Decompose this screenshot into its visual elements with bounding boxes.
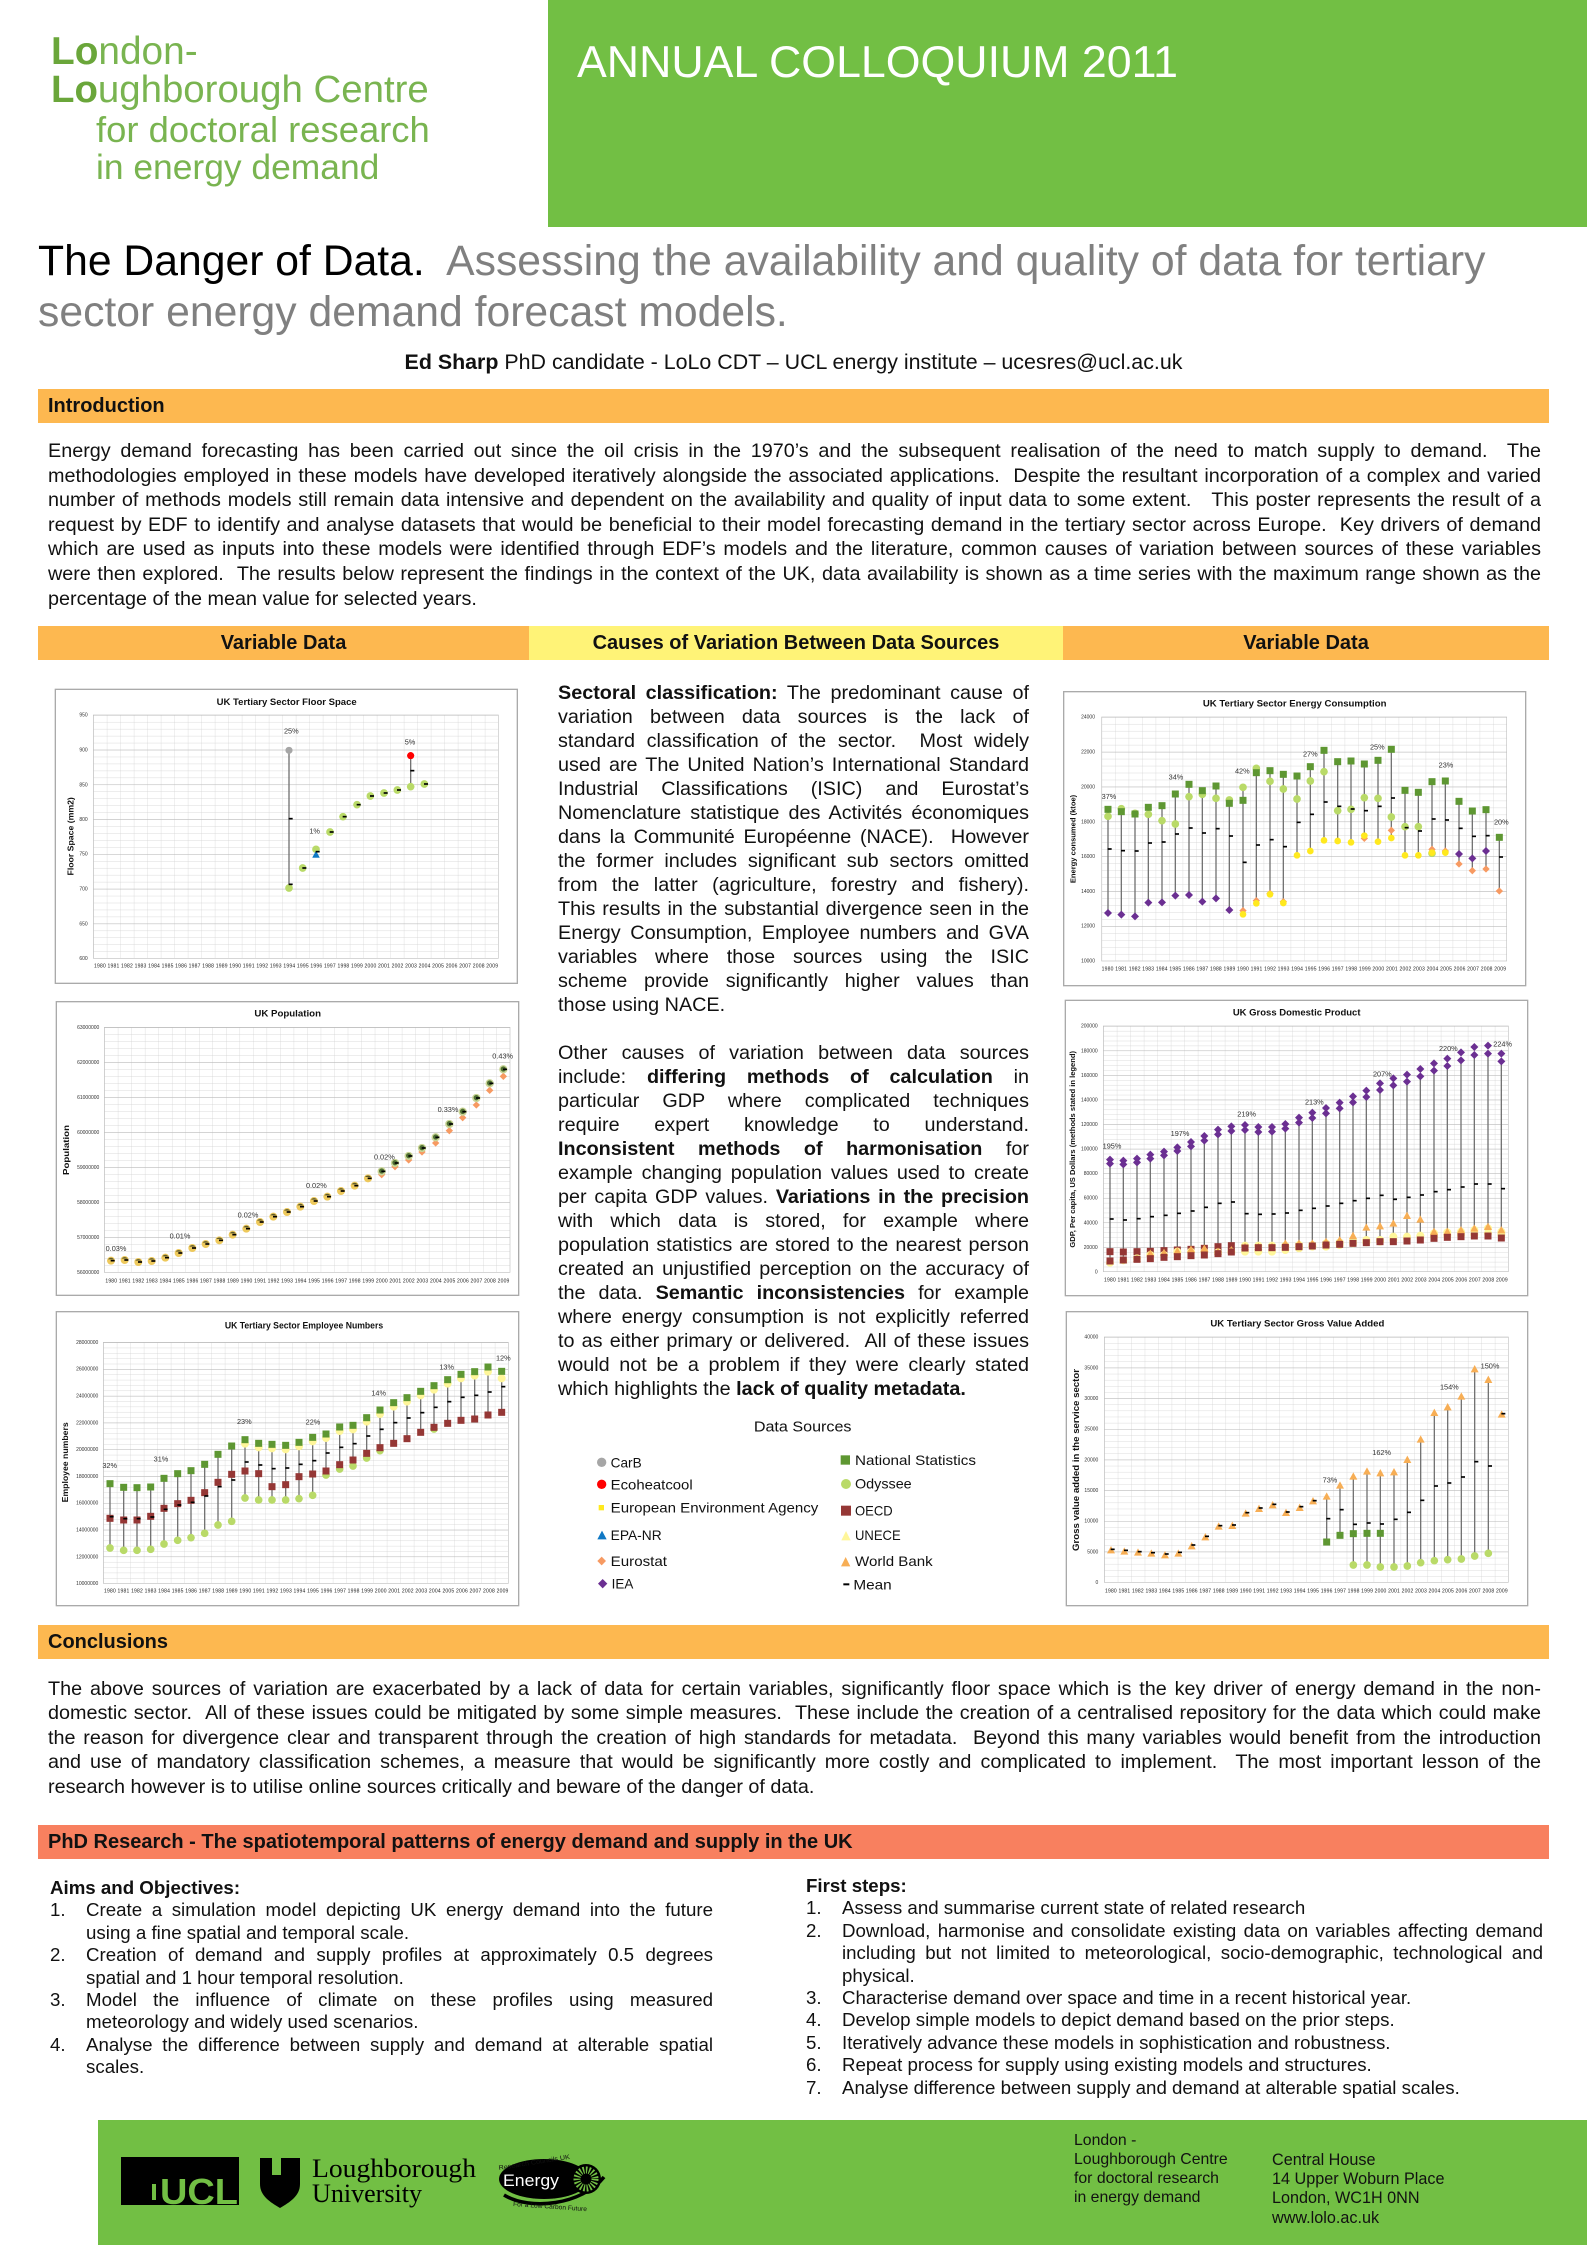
y axis labels: 180000 xyxy=(1081,1048,1098,1054)
legend column 1: Ecoheatcool xyxy=(611,1476,693,1492)
chart title: UK Tertiary Sector Energy Consumption xyxy=(1203,699,1386,709)
legend column 2: OECD xyxy=(855,1503,893,1519)
text: aims and objectives: spatial and 1 hour temporal resolution. xyxy=(86,1967,404,1988)
text: first steps: 4. xyxy=(806,2009,822,2030)
text: first steps: including but not limited to meteorological, socio-demographic, technological and xyxy=(842,1942,1543,1963)
text: causes of variation: would not be a problem if they were clearly stated xyxy=(558,1354,1029,1376)
logo: Energy: Research Councils UK xyxy=(498,2154,571,2172)
text: conclusions: the reason for divergence clear and transparent through the creation of high standards for metadata. Beyond this many variables would benefit from the introduction xyxy=(48,1727,1541,1749)
text: causes of variation: those using NACE. xyxy=(558,994,725,1016)
text: causes of variation: to as either primary or delivered. All of these issues xyxy=(558,1330,1029,1352)
x axis labels: 1980 1981 1982 1983 1984 1985 1986 1987 1988 1989 1990 1991 1992 1993 1994 1995 1996 1997 1998 1999 2000 2001 2002 2003 2004 2005 2006 2007 2008 2009 xyxy=(1104,1278,1508,1284)
text: first steps: Iteratively advance these models in sophistication and robustness. xyxy=(842,2032,1390,2053)
text: causes of variation: This results in the substantial divergence seen in the xyxy=(558,898,1029,920)
text: first steps: Characterise demand over space and time in a recent historical year. xyxy=(842,1987,1411,2008)
y axis labels: 61000000 xyxy=(77,1095,100,1101)
range labels: 34% xyxy=(1169,773,1184,782)
y axis labels xyxy=(1084,1335,1099,1586)
x axis labels: 1980 1981 1982 1983 1984 1985 1986 1987 1988 1989 1990 1991 1992 1993 1994 1995 1996 1997 1998 1999 2000 2001 2002 2003 2004 2005 2006 2007 2008 2009 xyxy=(105,1278,510,1284)
text: causes of variation: variation between data sources is the lack of xyxy=(558,706,1029,728)
footer text: address: Central House xyxy=(1272,2151,1375,2169)
text: aims and objectives: meteorology and widely used scenarios. xyxy=(86,2011,418,2032)
text: aims and objectives: scales. xyxy=(86,2056,144,2077)
chart title: UK Tertiary Sector Floor Space xyxy=(217,697,357,707)
y axis labels: 700 xyxy=(79,886,88,892)
text: causes of variation: from the latter (agriculture, forestry and fishery). xyxy=(558,874,1029,896)
range labels: 154% xyxy=(1440,1383,1459,1392)
text: introduction xyxy=(48,440,1541,610)
text: first steps: 1. xyxy=(806,1897,822,1918)
y axis labels: 57000000 xyxy=(77,1235,100,1241)
text: causes of variation: where energy consumption is not explicitly referred xyxy=(558,1306,1029,1328)
text: first steps: 5. xyxy=(806,2032,822,2053)
range labels: 5% xyxy=(405,738,416,747)
range labels: 150% xyxy=(1481,1362,1500,1371)
heading: Variable Data right xyxy=(1063,626,1549,660)
chart: UK Tertiary Sector Gross Value Added xyxy=(1066,1311,1528,1606)
x axis labels: 1980 1981 1982 1983 1984 1985 1986 1987 1988 1989 1990 1991 1992 1993 1994 1995 1996 1997 1998 1999 2000 2001 2002 2003 2004 2005 2006 2007 2008 2009 xyxy=(94,964,498,970)
range labels: 197% xyxy=(1171,1129,1190,1138)
data series xyxy=(111,1069,503,1262)
range labels: 25% xyxy=(284,726,299,735)
legend column 1 xyxy=(597,1454,818,1592)
legend column 2: Mean xyxy=(853,1576,892,1592)
footer text: address: 14 Upper Woburn Place xyxy=(1272,2170,1444,2188)
y axis labels: 25000 xyxy=(1084,1427,1099,1433)
y axis title: Gross value added in the service sector xyxy=(1071,1369,1081,1551)
range labels: 23% xyxy=(237,1417,252,1426)
logo: Loughborough University xyxy=(260,2156,476,2208)
range labels: 0.33% xyxy=(438,1105,459,1114)
poster title: sector energy demand forecast models. xyxy=(38,288,788,336)
legend column 1: CarB xyxy=(611,1454,642,1470)
logo: Energy xyxy=(498,2154,606,2213)
y axis labels: 14000 xyxy=(1081,889,1095,895)
text: aims and objectives: Creation of demand and supply profiles at approximately 0.5 degrees xyxy=(86,1944,713,1965)
x axis labels: 1980 1981 1982 1983 1984 1985 1986 1987 1988 1989 1990 1991 1992 1993 1994 1995 1996 1997 1998 1999 2000 2001 2002 2003 2004 2005 2006 2007 2008 2009 xyxy=(1102,967,1506,973)
y axis labels: 20000000 xyxy=(76,1447,99,1453)
logo: Loughborough University: University xyxy=(312,2179,422,2208)
y axis labels xyxy=(77,1025,100,1276)
text: aims and objectives: 2. xyxy=(50,1944,66,1965)
text: conclusions: domestic sector. All of these issues could be mitigated by some simple measures. These include the creation of a centralised repository for the data which could make xyxy=(48,1702,1541,1724)
footer text: centre name: in energy demand xyxy=(1074,2189,1200,2206)
text: first steps: First steps: xyxy=(806,1875,907,1896)
text: conclusions xyxy=(48,1678,1541,1798)
y axis labels: 62000000 xyxy=(77,1060,100,1066)
chart title: UK Tertiary Sector Gross Value Added xyxy=(1210,1319,1384,1329)
range labels: 31% xyxy=(154,1455,169,1464)
y axis labels: 30000 xyxy=(1084,1396,1099,1402)
x axis labels: 1980 1981 1982 1983 1984 1985 1986 1987 1988 1989 1990 1991 1992 1993 1994 1995 1996 1997 1998 1999 2000 2001 2002 2003 2004 2005 2006 2007 2008 2009 xyxy=(104,1589,509,1595)
y axis labels: 20000 xyxy=(1084,1245,1098,1251)
y axis title: Floor Space (mm2) xyxy=(66,797,76,875)
poster title: The Danger of Data. Assessing the availability and quality of data for tertiary xyxy=(38,237,1485,285)
heading: Conclusions xyxy=(38,1625,1549,1659)
heading: Introduction xyxy=(38,389,1549,423)
range labels xyxy=(106,1052,514,1253)
text: first steps: Assess and summarise current state of related research xyxy=(842,1897,1305,1918)
chart: UK Tertiary Sector Energy Consumption xyxy=(1063,691,1526,986)
text: causes of variation: with which data is stored, for example where xyxy=(558,1210,1029,1232)
y axis labels: 14000000 xyxy=(76,1527,99,1533)
range labels: 0.02% xyxy=(238,1210,259,1219)
legend column 2: World Bank xyxy=(855,1553,934,1569)
y axis labels: 20000 xyxy=(1084,1457,1099,1463)
text: causes of variation: the data. Semantic inconsistencies for example xyxy=(558,1282,1029,1304)
y axis labels: 16000000 xyxy=(76,1501,99,1507)
chart: UK Population xyxy=(56,1001,520,1296)
y axis labels: 10000 xyxy=(1081,959,1095,965)
text: first steps: 3. xyxy=(806,1987,822,2008)
y axis labels: 22000 xyxy=(1081,750,1095,756)
range labels: 25% xyxy=(1370,743,1385,752)
heading: Causes of Variation xyxy=(529,626,1063,660)
text: causes of variation: per capita GDP values. Variations in the precision xyxy=(558,1186,1029,1208)
y axis labels: 850 xyxy=(79,782,88,788)
logo: London-Loughborough Centre: London- xyxy=(51,30,198,73)
y axis labels: 16000 xyxy=(1081,854,1095,860)
range labels: 32% xyxy=(102,1461,117,1470)
text: first steps: 2. xyxy=(806,1920,822,1941)
text: causes of variation: Sectoral classification: The predominant cause of xyxy=(558,682,1029,704)
text: conclusions: research however is to utilise online sources critically and beware of the danger of data. xyxy=(48,1776,814,1798)
range labels: 1% xyxy=(309,826,320,835)
heading: Variable Data right: Variable Data xyxy=(1243,632,1369,654)
range labels: 220% xyxy=(1439,1044,1458,1053)
range labels: 219% xyxy=(1237,1110,1257,1119)
y axis labels: 20000 xyxy=(1081,784,1095,790)
heading: Introduction: Introduction xyxy=(48,395,165,417)
range labels: 224% xyxy=(1493,1039,1513,1048)
y axis labels xyxy=(76,1340,99,1587)
y axis labels: 120000 xyxy=(1081,1122,1098,1128)
text: causes of variation: scheme provide significantly higher values than xyxy=(558,970,1029,992)
chart: UK Gross Domestic Product xyxy=(1064,1000,1528,1296)
y axis labels: 60000000 xyxy=(77,1130,100,1136)
footer text: address: London, WC1H 0NN xyxy=(1272,2189,1420,2207)
y axis labels: 5000 xyxy=(1087,1549,1099,1555)
text: causes of variation: variables where those sources using the ISIC xyxy=(558,946,1029,968)
range labels: 0.43% xyxy=(492,1052,514,1061)
footer text: centre name: Loughborough Centre xyxy=(1074,2151,1228,2168)
y axis labels: 40000 xyxy=(1084,1220,1098,1226)
logo: London-Loughborough Centre: for doctoral research xyxy=(96,109,430,150)
text: aims and objectives: Analyse the difference between supply and demand at alterable spatial xyxy=(86,2034,713,2055)
text: aims and objectives: Aims and Objectives: xyxy=(50,1877,240,1898)
text: aims and objectives: 4. xyxy=(50,2034,66,2055)
range labels: 14% xyxy=(371,1388,386,1397)
heading: Variable Data left xyxy=(38,626,529,660)
chart title: UK Tertiary Sector Employee Numbers xyxy=(225,1321,383,1331)
legend column 2 xyxy=(841,1452,976,1592)
y axis labels: 28000000 xyxy=(76,1340,99,1346)
legend column 2: National Statistics xyxy=(855,1452,976,1468)
banner title: ANNUAL COLLOQUIUM 2011 xyxy=(577,38,1178,87)
logo: Energy: Energy xyxy=(503,2171,560,2190)
text: causes of variation: include: differing methods of calculation in xyxy=(558,1066,1029,1088)
text: introduction: which are used as inputs into these models were identified through EDF’s models and the literature, common causes of variation between sources of these variables xyxy=(48,538,1541,560)
y axis labels xyxy=(79,713,88,962)
header banner xyxy=(548,0,1587,227)
text: first steps xyxy=(806,1875,1543,2098)
y axis labels: 950 xyxy=(79,713,88,719)
chart title: UK Gross Domestic Product xyxy=(1233,1008,1360,1018)
y axis labels: 59000000 xyxy=(77,1165,100,1171)
data series xyxy=(289,750,424,888)
y axis labels: 12000000 xyxy=(76,1554,99,1560)
logo: London-Loughborough Centre: in energy demand xyxy=(96,147,379,187)
range labels: 0.01% xyxy=(170,1231,191,1240)
y axis title: Population xyxy=(61,1125,71,1175)
heading: PhD Research: PhD Research - The spatiotemporal patterns of energy demand and supply in the UK xyxy=(48,1831,853,1853)
text: first steps: Repeat process for supply using existing models and structures. xyxy=(842,2054,1372,2075)
text: causes of variation: population statistics are stored to the nearest person xyxy=(558,1234,1029,1256)
range labels: 37% xyxy=(1102,792,1117,801)
range labels: 195% xyxy=(1103,1142,1122,1151)
range labels xyxy=(102,1354,511,1470)
text: conclusions: The above sources of variation are exacerbated by a lack of data for certain variables, significantly floor space which is the key driver of energy demand in the non- xyxy=(48,1678,1541,1700)
y axis labels: 56000000 xyxy=(77,1270,100,1276)
range labels: 0.02% xyxy=(374,1153,395,1162)
y axis labels: 24000000 xyxy=(76,1394,99,1400)
range labels: 207% xyxy=(1373,1069,1392,1078)
range labels xyxy=(1323,1362,1500,1485)
y axis labels: 0 xyxy=(1095,1269,1098,1275)
y axis title: Energy consumed (ktoe) xyxy=(1069,794,1078,883)
text: first steps: Analyse difference between supply and demand at alterable spatial scales. xyxy=(842,2077,1460,2098)
text: causes of variation: Nomenclature statistique des Activités économiques xyxy=(558,802,1029,824)
range labels: 12% xyxy=(496,1354,511,1363)
text: causes of variation: the former includes significant sub sectors omitted xyxy=(558,850,1029,872)
text: causes of variation: dans la Communité Européenne (NACE). However xyxy=(558,826,1029,848)
y axis labels: 0 xyxy=(1096,1580,1099,1586)
legend column 2: UNECE xyxy=(855,1527,901,1543)
range labels: 0.03% xyxy=(106,1244,127,1253)
y axis labels: 15000 xyxy=(1084,1488,1099,1494)
y axis labels: 24000 xyxy=(1081,715,1095,721)
text: aims and objectives: Model the influence of climate on these profiles using measured xyxy=(86,1989,713,2010)
data series xyxy=(1110,1046,1501,1263)
x axis labels: 1980 1981 1982 1983 1984 1985 1986 1987 1988 1989 1990 1991 1992 1993 1994 1995 1996 1997 1998 1999 2000 2001 2002 2003 2004 2005 2006 2007 2008 2009 xyxy=(1105,1588,1508,1594)
y axis title: Employee numbers xyxy=(60,1422,70,1502)
y axis labels: 80000 xyxy=(1084,1171,1098,1177)
y axis labels: 12000 xyxy=(1081,924,1095,930)
y axis labels: 40000 xyxy=(1084,1335,1099,1341)
range labels: 213% xyxy=(1305,1098,1324,1107)
legend: data sources xyxy=(597,1419,976,1592)
range labels: 0.02% xyxy=(306,1181,327,1190)
chart title: UK Population xyxy=(254,1009,321,1019)
chart: UK Tertiary Sector Employee Numbers xyxy=(56,1311,520,1606)
author line: Ed Sharp PhD candidate - LoLo CDT – UCL energy institute – ucesres@ucl.ac.uk xyxy=(405,350,1182,374)
y axis title: GDP, Per capita, US Dollars (methods stated in legend) xyxy=(1068,1050,1077,1248)
y axis labels: 160000 xyxy=(1081,1073,1098,1079)
y axis labels: 750 xyxy=(79,852,88,858)
legend column 1: IEA xyxy=(612,1576,634,1592)
chart: UK Tertiary Sector Floor Space xyxy=(54,688,518,984)
logo: London-Loughborough Centre xyxy=(51,30,430,187)
heading: Causes of Variation: Causes of Variation Between Data Sources xyxy=(593,632,999,654)
text: introduction: Energy demand forecasting has been carried out since the oil crisis in the 1970’s and the subsequent realisation of the need to match supply to demand. The xyxy=(48,440,1541,462)
range labels xyxy=(284,726,416,835)
range labels: 20% xyxy=(1494,818,1509,827)
data series xyxy=(1111,1369,1502,1567)
range labels: 13% xyxy=(439,1363,454,1372)
text: first steps: Download, harmonise and consolidate existing data on variables affecting demand xyxy=(842,1920,1543,1941)
y axis labels: 600 xyxy=(79,956,88,962)
footer band xyxy=(98,2120,1587,2245)
text: causes of variation: which highlights the lack of quality metadata. xyxy=(558,1378,966,1400)
text: introduction: methodologies employed in these models have developed iteratively alongside the associated applications. Despite the resultant incorporation of a complex and varied xyxy=(48,465,1541,487)
text: aims and objectives xyxy=(50,1877,713,2077)
legend column 2: Odyssee xyxy=(855,1475,912,1491)
text: causes of variation: used are The United Nation’s International Standard xyxy=(558,754,1029,776)
legend column 1: EPA-NR xyxy=(611,1527,662,1543)
text: causes of variation: require expert knowledge to understand. xyxy=(558,1114,1029,1136)
text: first steps: 7. xyxy=(806,2077,822,2098)
footer text: address: www.lolo.ac.uk xyxy=(1272,2209,1379,2227)
y axis labels: 26000000 xyxy=(76,1367,99,1373)
text: aims and objectives: Create a simulation model depicting UK energy demand into the future xyxy=(86,1899,713,1920)
legend title: Data Sources xyxy=(754,1419,852,1435)
y axis labels: 35000 xyxy=(1084,1365,1099,1371)
y axis labels: 100000 xyxy=(1081,1147,1098,1153)
heading: Variable Data left: Variable Data xyxy=(221,632,346,654)
footer text: centre name: for doctoral research xyxy=(1074,2170,1219,2187)
y axis labels: 800 xyxy=(79,817,88,823)
text: causes of variation: Industrial Classifications (ISIC) and Eurostat’s xyxy=(558,778,1029,800)
text: causes of variation: Other causes of variation between data sources xyxy=(558,1042,1029,1064)
heading: PhD Research xyxy=(38,1825,1549,1859)
text: causes of variation xyxy=(558,682,1030,1400)
y axis labels: 60000 xyxy=(1084,1196,1098,1202)
legend column 1: European Environment Agency xyxy=(611,1500,818,1516)
y axis labels: 18000000 xyxy=(76,1474,99,1480)
range labels xyxy=(1103,1039,1513,1151)
y axis labels: 10000000 xyxy=(76,1581,99,1587)
logo: UCL xyxy=(121,2157,239,2205)
text: introduction: were then explored. The results below represent the findings in the context of the UK, data availability is shown as a time series with the maximum range shown as the xyxy=(48,563,1541,585)
y axis labels: 58000000 xyxy=(77,1200,100,1206)
y axis labels: 18000 xyxy=(1081,819,1095,825)
heading: Conclusions: Conclusions xyxy=(48,1631,168,1653)
range labels: 27% xyxy=(1303,749,1318,758)
logo: London-Loughborough Centre: Loughborough Centre xyxy=(51,68,429,111)
y axis labels: 650 xyxy=(79,921,88,927)
y axis labels: 200000 xyxy=(1081,1024,1098,1030)
footer text: address xyxy=(1272,2151,1444,2227)
logo: Energy: For a Low Carbon Future xyxy=(513,2201,588,2213)
text: first steps: 6. xyxy=(806,2054,822,2075)
text: causes of variation: Inconsistent methods of harmonisation for xyxy=(558,1138,1029,1160)
footer text: centre name xyxy=(1074,2132,1228,2206)
text: introduction: request by EDF to identify and analyse datasets that would be beneficial to their model forecasting demand in the tertiary sector across Europe. Key drivers of demand xyxy=(48,514,1541,536)
y axis labels: 900 xyxy=(79,747,88,753)
y axis labels: 22000000 xyxy=(76,1420,99,1426)
text: causes of variation: standard classification of the sector. Most widely xyxy=(558,730,1029,752)
range labels: 23% xyxy=(1439,760,1454,769)
text: aims and objectives: using a fine spatial and temporal scale. xyxy=(86,1922,409,1943)
text: aims and objectives: 1. xyxy=(50,1899,66,1920)
text: causes of variation: Energy Consumption, Employee numbers and GVA xyxy=(558,922,1029,944)
text: causes of variation: created an unjustified perception on the accuracy of xyxy=(558,1258,1029,1280)
footer text: centre name: London - xyxy=(1074,2132,1136,2149)
y axis labels xyxy=(1081,715,1095,965)
text: first steps: physical. xyxy=(842,1965,915,1986)
text: conclusions: and use of mandatory classification schemes, a measure that would be significantly more costly and complicated to implement. The most important lesson of the xyxy=(48,1751,1541,1773)
text: first steps: Develop simple models to depict demand based on the prior steps. xyxy=(842,2009,1395,2030)
legend column 1: Eurostat xyxy=(611,1553,667,1569)
y axis labels: 140000 xyxy=(1081,1097,1098,1103)
y axis labels: 63000000 xyxy=(77,1025,100,1031)
data series xyxy=(1108,749,1499,916)
text: causes of variation: particular GDP where complicated techniques xyxy=(558,1090,1029,1112)
range labels: 73% xyxy=(1323,1476,1338,1485)
poster title xyxy=(38,237,1486,336)
text: aims and objectives: 3. xyxy=(50,1989,66,2010)
text: introduction: number of methods models still remain data intensive and dependent on the availability and quality of input data to some extent. This poster represents the result of a xyxy=(48,489,1541,511)
range labels xyxy=(1102,743,1509,827)
text: introduction: percentage of the mean value for selected years. xyxy=(48,588,477,610)
y axis labels xyxy=(1081,1024,1098,1275)
data series xyxy=(110,1367,502,1550)
range labels: 42% xyxy=(1235,766,1250,775)
y axis labels: 10000 xyxy=(1084,1519,1099,1525)
range labels: 162% xyxy=(1372,1448,1392,1457)
text: causes of variation: example changing population values used to create xyxy=(558,1162,1029,1184)
range labels: 22% xyxy=(306,1417,321,1426)
